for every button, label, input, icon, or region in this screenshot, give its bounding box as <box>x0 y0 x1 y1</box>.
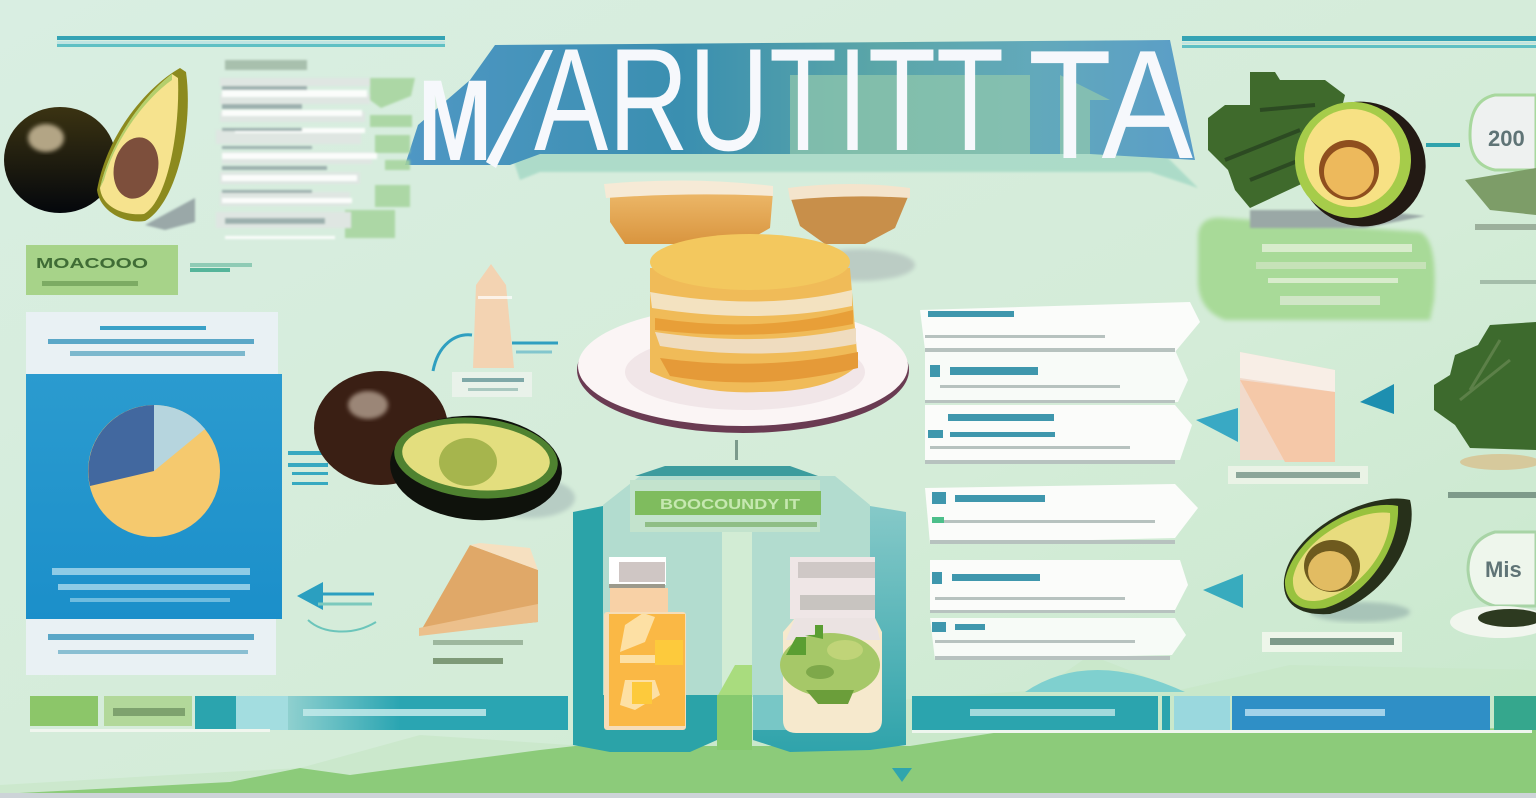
icon: small bottle <box>473 264 514 368</box>
banner <box>630 480 821 532</box>
label: avocado caption <box>1262 632 1402 652</box>
arrow: top right connector <box>1426 143 1460 147</box>
panel: jars <box>573 466 906 752</box>
label: green tag left: MOACOOO <box>36 255 148 272</box>
icon: beige box <box>1240 352 1335 462</box>
label: box caption <box>1228 466 1368 484</box>
top left rule <box>57 36 445 47</box>
callout: top right bubble: 200 <box>1488 126 1525 151</box>
icon: top right small greens <box>1465 168 1536 284</box>
marker dot <box>892 768 912 782</box>
icon: lower right dish <box>1450 606 1536 638</box>
pie chart graphic <box>88 405 220 537</box>
arrows: bottle connectors <box>433 335 558 371</box>
arrows: left stripes <box>288 451 328 485</box>
icon: kale and avocado top right <box>1208 72 1446 247</box>
icon: avocado lower right <box>1284 498 1412 622</box>
banner: BOOCOUNDY IT <box>660 496 800 513</box>
callout: lower right bubble: Mis <box>1485 557 1522 582</box>
label: right small <box>1448 454 1536 498</box>
title: TA <box>1028 18 1194 191</box>
icon: whole and half avocado top left <box>4 68 195 230</box>
arrows: right of cards <box>1196 384 1394 608</box>
label: cheese caption <box>433 640 523 664</box>
icon: plate with pancakes <box>577 234 909 433</box>
icon: avocado centre <box>314 371 575 526</box>
label: bottle caption <box>452 372 532 397</box>
connector <box>735 440 738 460</box>
panel: pie chart <box>26 312 282 675</box>
icon: bread bowls <box>604 180 915 281</box>
title: ARUTITT <box>534 18 1004 181</box>
icon: green jar <box>780 557 882 733</box>
top right rule <box>1182 36 1536 48</box>
bar: bottom right banner <box>912 696 1536 733</box>
bar: bottom left banner <box>30 696 568 732</box>
callout: lower right bubble <box>1468 532 1536 606</box>
text list: centre-right cards <box>920 302 1200 660</box>
icon: yellow jar <box>604 557 686 730</box>
text list: top left <box>216 60 415 239</box>
label: green tag left <box>26 245 252 295</box>
arrows: lower left <box>297 582 376 632</box>
bottom waves <box>0 655 1536 798</box>
icon: cheese wedge <box>419 543 538 636</box>
icon: kale right <box>1434 322 1536 450</box>
title: M <box>418 57 492 185</box>
panel: green note <box>1198 218 1435 320</box>
callout: top right bubble <box>1470 95 1536 170</box>
